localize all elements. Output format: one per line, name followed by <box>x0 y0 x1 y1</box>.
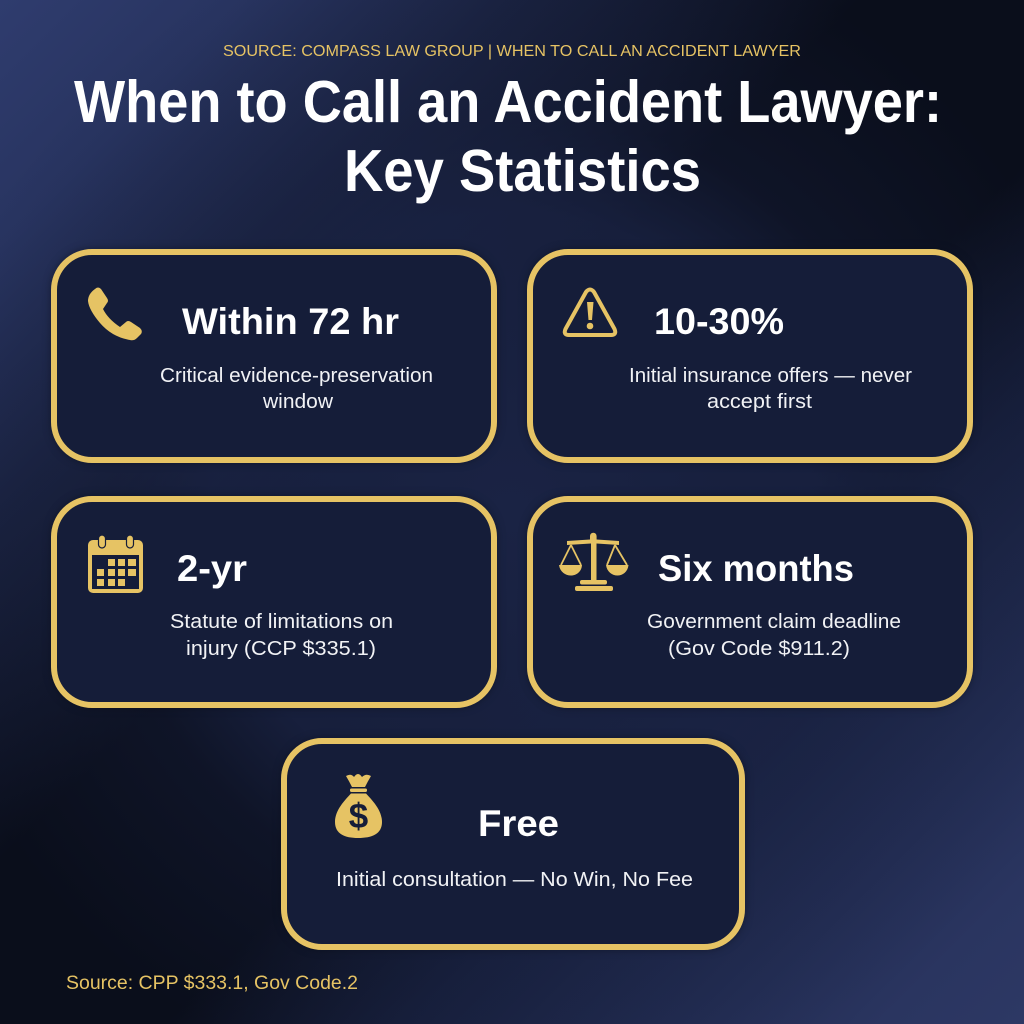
icon: phone <box>88 288 142 340</box>
description: Initial insurance offers — never <box>629 365 912 387</box>
panel: free <box>284 741 742 947</box>
description: window <box>262 391 334 413</box>
stat: six months: Six months <box>658 548 854 589</box>
description <box>160 365 433 413</box>
description <box>170 611 393 660</box>
icon: money bag <box>335 774 382 838</box>
title: Key Statistics <box>344 138 701 204</box>
stat: 10-30%: 10-30% <box>654 301 784 342</box>
footer source: Source: CPP $333.1, Gov Code.2 <box>66 973 358 994</box>
description: Initial consultation — No Win, No Fee <box>336 869 693 891</box>
panel: 10-30% <box>530 252 970 460</box>
description: (Gov Code $911.2) <box>668 638 850 660</box>
panel: 2-yr <box>54 499 494 705</box>
description: accept first <box>707 391 812 413</box>
description <box>647 611 901 660</box>
description: Critical evidence-preservation <box>160 365 433 387</box>
description: Government claim deadline <box>647 611 901 633</box>
panel: within 72 hr <box>54 252 494 460</box>
stat: 2-yr: 2-yr <box>177 548 247 589</box>
source line: SOURCE: COMPASS LAW GROUP | WHEN TO CALL AN ACCIDENT LAWYER <box>223 43 801 60</box>
stat: within 72 hr: Within 72 hr <box>182 301 399 342</box>
title <box>74 69 942 204</box>
icon: warning triangle <box>565 290 615 335</box>
description: injury (CCP $335.1) <box>186 638 376 660</box>
description: Statute of limitations on <box>170 611 393 633</box>
icon: money bag: $ <box>349 797 368 836</box>
description <box>629 365 912 413</box>
stat: free: Free <box>478 803 559 844</box>
title: When to Call an Accident Lawyer: <box>74 69 942 135</box>
icon: calendar <box>88 535 143 593</box>
panel: six months <box>530 499 970 705</box>
icon: scales of justice <box>559 533 628 591</box>
